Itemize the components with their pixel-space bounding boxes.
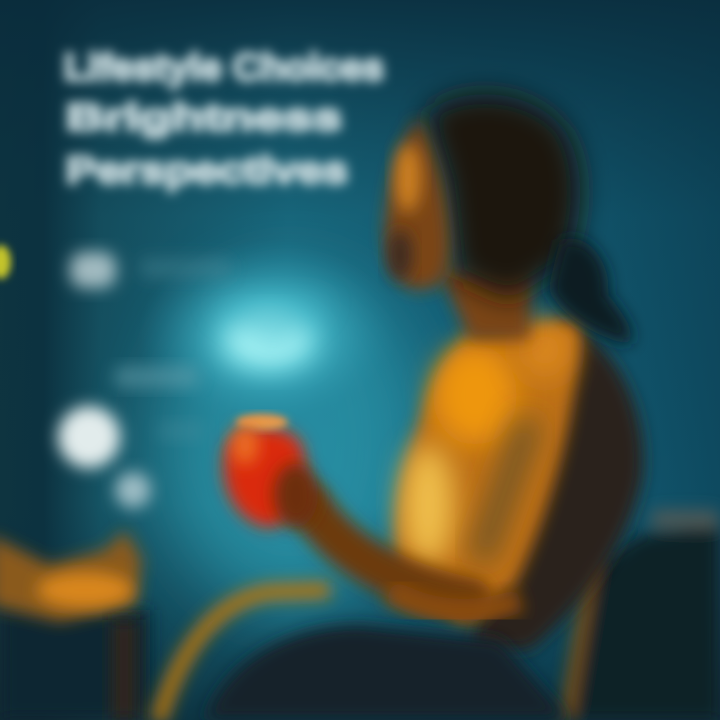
icon: red fruit in hand: [223, 414, 318, 528]
icon: large white circle: [58, 406, 120, 468]
ponytail: [548, 238, 631, 345]
chair: [566, 510, 720, 720]
hair: [425, 94, 580, 300]
icon: small white circle: [115, 472, 151, 508]
face: [385, 118, 450, 290]
table at lower left: [0, 530, 150, 720]
title: Brightness: [66, 97, 342, 139]
arm: [310, 505, 470, 600]
side label: [158, 422, 204, 440]
lap: [205, 625, 570, 720]
central glow: [138, 240, 420, 610]
title: Perspectives: [66, 150, 348, 192]
small label: [114, 366, 198, 388]
neck: [440, 270, 530, 340]
icon: yellow dot on left edge: [0, 245, 11, 279]
torso: [394, 320, 580, 625]
subtitle row: [70, 252, 230, 288]
back: [470, 320, 643, 650]
title: [64, 47, 384, 192]
lower arm outline: [158, 590, 330, 720]
title: Lifestyle Choices: [64, 47, 384, 89]
person: [158, 94, 720, 720]
